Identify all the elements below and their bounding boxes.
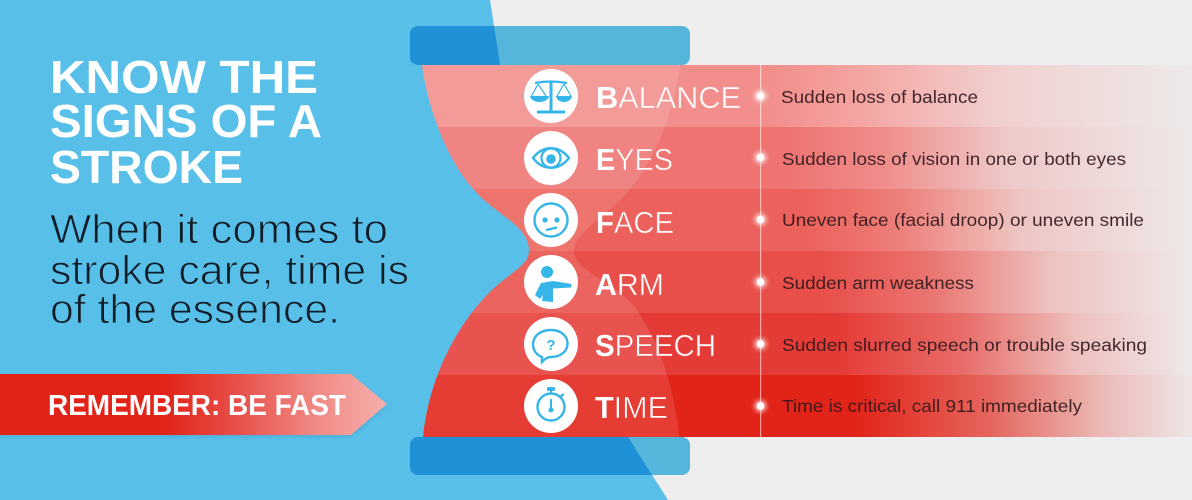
icon: balance scale xyxy=(524,69,578,123)
timeline dot xyxy=(754,90,766,102)
title: SIGNS OF A xyxy=(50,95,322,147)
subtitle text: When it comes to xyxy=(50,206,388,252)
label: balance: BALANCE xyxy=(596,80,741,115)
label: speech: SPEECH xyxy=(595,328,716,363)
label: eyes: EYES xyxy=(596,142,673,177)
description: time: Time is critical, call 911 immediately xyxy=(782,396,1082,416)
row: eyes xyxy=(524,131,1126,185)
timeline line xyxy=(760,65,761,437)
title xyxy=(50,51,322,193)
title: KNOW THE xyxy=(50,51,318,103)
icon: stopwatch xyxy=(524,379,578,433)
description: balance: Sudden loss of balance xyxy=(781,87,978,107)
row: balance xyxy=(524,69,978,123)
label: face: FACE xyxy=(596,205,674,240)
timeline dot xyxy=(754,214,766,226)
description: speech: Sudden slurred speech or trouble speaking xyxy=(782,335,1147,355)
subtitle text: of the essence. xyxy=(50,286,340,332)
icon: uneven face xyxy=(524,193,578,247)
callout banner: remember be fast: REMEMBER: BE FAST xyxy=(48,390,346,422)
row: time xyxy=(524,379,1082,433)
label: time: TIME xyxy=(595,390,668,425)
red symptom rows xyxy=(400,65,1192,437)
timeline dot xyxy=(754,400,766,412)
hourglass glass overlay xyxy=(422,65,680,437)
row: face xyxy=(524,193,1144,247)
title: STROKE xyxy=(50,141,243,193)
top hourglass bar xyxy=(410,26,690,65)
subtitle text: stroke care, time is xyxy=(50,247,409,293)
description: eyes: Sudden loss of vision in one or both eyes xyxy=(782,149,1126,169)
timeline dot xyxy=(754,276,766,288)
icon: arm raised xyxy=(524,255,578,309)
icon: eye xyxy=(524,131,578,185)
icon: speech bubble xyxy=(524,317,578,371)
bottom hourglass bar xyxy=(410,437,690,475)
subtitle text xyxy=(50,206,409,332)
label: arm: ARM xyxy=(595,267,664,302)
icon: speech bubble: ? xyxy=(546,337,556,354)
row: speech xyxy=(524,317,1147,371)
description: face: Uneven face (facial droop) or uneven smile xyxy=(782,210,1144,230)
callout banner: remember be fast xyxy=(0,374,387,437)
timeline dot xyxy=(754,152,766,164)
description: arm: Sudden arm weakness xyxy=(782,273,974,293)
timeline dot xyxy=(754,338,766,350)
row: arm xyxy=(524,255,974,309)
background: blue panel xyxy=(0,0,668,500)
